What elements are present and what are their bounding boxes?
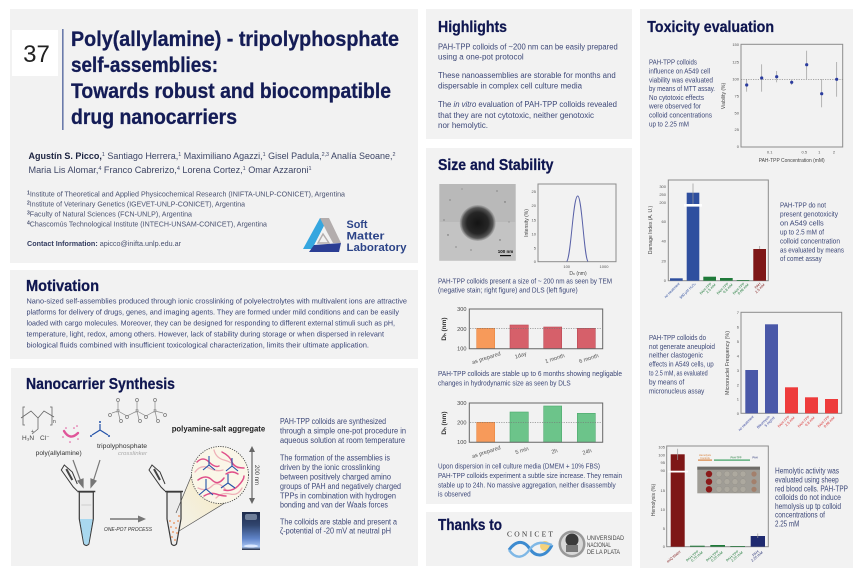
inset: hemolysis plate photo: Controls [700,456,711,460]
bar chart: hemolysis: 0.75 mM [690,551,704,563]
text: MTT assay: influence on A549 cell [649,66,710,75]
authors: Maria Lis Alomar, [28,165,99,175]
poster number [12,30,58,76]
DLS plot: 0 [534,259,537,264]
DLS plot: 15 [532,218,537,222]
chemical structure: poly(allylamine): H₃N [22,435,34,442]
chemical structure: tripolyphosphate [108,398,166,422]
icon: crosslinker [90,421,110,437]
bar chart: stability in cell culture media [441,401,603,460]
bar chart: stability in cell culture media: 24h [582,448,593,457]
affiliations: Institute of Veterinary Genetics (IGEVET-UNLP-CONICET), Argentina [30,202,245,209]
DLS plot: 5 [534,246,537,250]
authors: 1 [243,166,246,172]
caption: culture media: Upon dispersion in cell culture media (DMEM + 10% FBS) [438,462,600,471]
bar chart: micronucleus frequency: Micronuclei Frequency (%) [725,331,731,395]
bar chart: hemolysis: 95 [661,460,666,465]
bar chart: micronucleus frequency: Bleomycin [756,415,771,429]
scatter chart: viability: 0.1 [767,150,773,154]
bar chart: micronucleus frequency: no treatment [738,415,755,432]
bar chart: comet assay: no treatment [664,282,681,299]
bar chart: comet assay: 20 [662,258,667,264]
bar chart: micronucleus frequency: 7 [737,310,740,315]
panel: title [10,9,418,263]
logo: soft matter laboratory [303,218,407,254]
body text: platforms for delivery of drugs, genes, and imaging agents. They are formed under mild conditions and can be easily [26,308,399,317]
inset: hemolysis plate photo: PAH [752,456,758,460]
authors: Franco Cabrerizo, [101,165,177,175]
caption: culture media: stable up to 24h. No massive aggregation, neither disassembly [438,480,616,489]
text: comet assay: up to 2.5 mM of [780,227,825,236]
logo: CONICET: CONICET [507,530,553,539]
bar chart: comet assay: 2.5 mM [754,283,766,294]
bar chart: hemolysis: 15 [661,488,666,493]
scatter chart: viability: 50 [735,110,740,116]
bar chart: comet assay: 0 [664,278,667,283]
text: micronucleus assay: neither clastogenic [649,351,703,360]
bar chart: comet assay: PAH-TPP [716,281,730,296]
heading: Motivation [26,278,99,295]
caption: storage stability: changes in hydrodynamic size as seen by DLS [438,378,571,387]
authors: 4 [177,166,180,172]
bar chart: micronucleus frequency: 4 [737,354,740,358]
text: MTT assay: were observed for [648,102,701,111]
magnification cone [176,460,233,531]
caption: culture media: PAH-TPP colloids experiment a subtle size increase. They remain [438,471,622,480]
affiliations: 2 [27,201,30,207]
panel: thanks [426,512,632,566]
authors: 4 [98,166,101,172]
bar chart: comet assay: PAH-TPP [699,281,713,296]
bar chart: storage stability: 200 [457,327,466,333]
authors: 1 [178,152,181,158]
DLS plot: 100 [563,264,571,269]
bar chart: stability in cell culture media: 2h [551,448,559,456]
panel: nanocarrier synthesis [11,368,418,566]
affiliations: Chascomús Technological Institute (INTECH-UNSAM-CONICET), Argentina [30,222,267,229]
bar chart: storage stability: 6 month [579,353,600,365]
panel: toxicity evaluation [640,9,853,568]
text: micronucleus assay [649,333,715,395]
scatter chart: viability: PAH-TPP Concentration (mM) [759,158,825,164]
DLS plot: Intensity (%) [524,209,530,237]
logo: UNLP: DE LA PLATA [587,550,620,556]
bar chart: storage stability: 1day [514,351,528,361]
DLS plot: 1000 [600,264,609,269]
logo: soft matter laboratory: Matter [346,230,385,242]
text: comet assay: PAH-TPP do not [780,201,827,210]
bar chart: hemolysis: 0.25 mM [710,551,724,563]
text: comet assay: present genotoxicity [780,210,838,219]
magnified aggregate [192,446,248,504]
scatter chart: viability: 150 [732,42,740,47]
DLS plot: 25 [532,189,537,194]
labels: poly(allylamine) [36,450,82,457]
bar chart: micronucleus frequency: PAH-TPP [817,414,831,429]
text: MTT assay: PAH-TPP colloids [649,58,697,67]
scatter chart: viability: 75 [735,94,740,98]
DLS plot [524,184,616,277]
tube: before mixing [61,465,95,546]
inset: hemolysis plate photo: PAH-TPP [730,456,742,460]
logo: soft matter laboratory: Soft [346,219,368,231]
bar chart: hemolysis: 5 [663,526,666,531]
authors: Gisel Padula, [266,151,322,161]
logo: UNLP: UNIVERSIDAD [587,536,625,542]
scatter chart: viability: 125 [732,60,740,64]
DLS plot: 20 [532,203,537,208]
bar chart: micronucleus frequency: PAH-TPP [777,414,791,429]
synthesis text: ζ-potential of -20 mV at neutral pH [280,527,391,536]
bar chart: comet assay: 2.5 mM [705,283,717,294]
scatter chart: viability: 100 [732,76,740,82]
caption: size: (negative stain; right figure) and DLS (left figure) [438,286,578,295]
text: hemolysis: Hemolytic activity was [775,466,839,475]
text: micronucleus assay: PAH-TPP colloids do [649,333,706,342]
bar chart: comet assay: 500 μM H₂O₂ [679,281,697,300]
heading: Thanks to [438,517,502,534]
authors: Maximiliano Agazzi, [181,151,263,161]
authors: 1 [308,166,312,172]
highlights text: that they are not cytotoxic, neither genotoxic [438,111,594,120]
caption: size: PAH-TPP colloids present a size of ~ 200 nm as seen by TEM [438,276,612,285]
bar chart: stability in cell culture media: 200 [457,420,466,426]
bar chart: hemolysis: 2.25 mM [730,551,744,563]
scatter chart: viability: 25 [735,127,740,132]
bar chart: stability in cell culture media: 100 [457,440,466,446]
text: comet assay: colloid concentration [780,236,840,245]
highlights text: PAH-TPP colloids of ~200 nm can be easily prepared [438,42,618,52]
text: MTT assay: colloid concentrations [649,111,712,120]
bar chart: storage stability: 100 [457,346,466,352]
highlights text: using a one-pot protocol [438,52,524,62]
bar chart: comet assay: 0.8 mM [722,283,734,294]
chemical structure: tripolyphosphate: P [153,409,157,415]
bar chart: hemolysis: PAH-TPP [685,549,700,563]
heading: Nanocarrier Synthesis [26,376,175,393]
chemical structure: poly(allylamine): + [31,429,34,435]
authors: 1 [263,152,266,158]
bar chart: micronucleus frequency [725,310,842,432]
panel: highlights [426,9,632,139]
authors: Santiago Herrera, [105,151,178,161]
scatter chart: viability: 0.5 [802,150,808,154]
bar chart: hemolysis: 2.25 mM [750,551,764,563]
bar chart: micronucleus frequency: 3 [737,368,740,373]
title [71,28,399,129]
bar chart: hemolysis: 10 [661,507,666,512]
bar chart: micronucleus frequency: 6 [737,324,740,330]
caption: storage stability: PAH-TPP colloids are stable up to 6 months showing negligable [438,369,622,378]
synthesis text: PAH-TPP colloids are synthesized [280,417,386,426]
synthesis text: driven by the ionic crosslinking [280,463,380,472]
text: comet assay: on A549 cells [780,219,824,228]
chemical structure: tripolyphosphate: P [135,409,139,415]
bar chart: stability in cell culture media: 5 min [515,446,530,456]
scatter chart: viability: 1 [818,150,821,154]
icon: polyamine strand [62,425,79,443]
size arrow: 200 nm [253,465,259,485]
panel: motivation [10,270,418,359]
bar chart: storage stability: Dₕ (nm) [441,317,448,341]
bar chart: comet assay [648,180,768,300]
bar chart: storage stability: 300 [457,307,466,313]
bar chart: comet assay: 300 [659,184,667,189]
chemical structure: poly(allylamine): n [53,419,56,425]
chemical structure: tripolyphosphate: P [116,409,120,415]
bar chart: hemolysis: 100 [658,452,666,458]
bar chart: micronucleus frequency: 0 [737,411,740,416]
title: self-assemblies: [71,54,218,77]
DLS plot: Dₕ (nm) [569,271,587,277]
chemical structure: poly(allylamine) [21,407,56,442]
process arrow [104,516,152,533]
text: comet assay [780,201,844,263]
bar chart: micronucleus frequency: PAH-TPP [797,414,811,429]
affiliations: 4 [27,221,30,227]
heading: Highlights [438,19,507,36]
arrows into tube [73,460,100,487]
contact information: Contact Information: apicco@inifta.unlp.edu.ar [27,241,182,248]
bar chart: comet assay: 0.08 mM [737,283,750,296]
authors: Omar Azzaroni [246,165,308,175]
body text [26,297,407,349]
caption: storage stability [438,369,622,387]
text: MTT assay: up to 2.25 mM [649,120,689,129]
authors: Analía Seoane, [329,151,393,161]
bar chart: micronucleus frequency: 1 [737,396,740,402]
bar chart: comet assay: 200 [659,200,667,205]
bar chart: comet assay: 250 [659,192,667,197]
synthesis text [280,417,406,536]
bar chart: comet assay: Damage Index (A. U.) [648,205,654,254]
caption: culture media: is observed [438,490,471,499]
authors: 2 [393,152,396,158]
affiliations: Faculty of Natural Sciences (FCN-UNLP), Argentina [30,212,192,219]
caption: culture media [438,462,622,499]
highlights text [438,42,618,130]
text: hemolysis: 2.25 mM [775,520,800,529]
bar chart: storage stability [441,307,603,366]
heading: Toxicity evaluation [647,19,774,36]
text: MTT assay [648,58,715,129]
highlights text: dispersable in complex cell culture media [438,82,583,90]
body text: Nano-sized self-assemblies produced through ionic crosslinking of polyelectrolytes with multivalent ions are attractive [26,297,407,306]
labels [36,425,266,457]
text: micronucleus assay: micronucleus assay [649,386,704,395]
scatter chart: viability: 0 [737,144,740,149]
synthesis text: The formation of the assemblies is [280,453,390,462]
tube: after mixing [149,465,183,546]
bar chart: comet assay: PAH-TPP [732,281,746,296]
process arrow: ONE-POT PROCESS [104,527,152,533]
bar chart: micronucleus frequency: 2.5 mM [784,416,796,427]
size arrow [249,446,259,504]
bar chart: hemolysis [651,444,768,564]
inset: hemolysis plate photo [697,453,760,493]
text: MTT assay: No cytotoxic effects [649,93,704,102]
body text: temperature, light, redox, among others. However, lack of stability during storage or when dispersed in relevant [26,330,385,339]
bar chart: hemolysis: 90 [661,468,666,473]
bar chart: comet assay: PAH [754,282,762,290]
scatter chart: viability: Viability (%) [721,83,727,109]
synthesis text: TPPs in combination with hydrogen [280,491,396,500]
bar chart: micronucleus frequency: 5 mg/ml [764,416,776,428]
text: micronucleus assay: not generate aneuploid [649,342,715,351]
authors: 1 [102,152,105,158]
bar chart: hemolysis: PAH [752,549,760,557]
inset: hemolysis plate photo: Hemolysis [699,453,712,457]
synthesis text: groups of PAH and negatively charged [280,482,401,491]
text: MTT assay: viability was evaluated [649,75,713,84]
authors [28,151,396,175]
affiliations: Institute of Theoretical and Applied Physicochemical Research (INIFTA-UNLP-CONICET), Argentina [30,192,345,199]
text: comet assay: of comet assay [780,254,822,263]
bar chart: stability in cell culture media: Dₕ (nm) [441,411,448,435]
bar chart: hemolysis: Hemolysis (%) [651,484,657,516]
bar chart: storage stability: as prepared [471,351,502,366]
text: micronucleus assay: by means of [649,377,685,386]
text: hemolysis [775,466,848,529]
bar chart: comet assay: 40 [662,238,667,244]
bar chart: micronucleus frequency: 2 [737,382,740,388]
chemical structure: poly(allylamine): Cl⁻ [40,435,50,442]
bar chart: storage stability: 1 month [545,353,566,365]
highlights text: These nanoassemblies are storable for months and [438,71,616,80]
affiliations: 3 [27,211,30,217]
synthesis text: through a simple one-pot procedure in [280,427,406,436]
bar chart: hemolysis: PAH-TPP [705,549,720,563]
poster number: 37 [23,41,50,68]
text: micronucleus assay: to 2.5 mM, as evaluated [649,369,708,378]
body text: biological fluids combined with insufficient toxicological characterization, limits their ultimate application. [26,340,369,349]
logo: CONICET [507,530,553,557]
highlights text: The in vitro evaluation of PAH-TPP colloids revealed [438,100,617,109]
bar chart: hemolysis: 0 [663,544,666,549]
bar chart: hemolysis: PAH-TPP [725,549,740,563]
bar chart: hemolysis: 105 [658,444,666,450]
panel: size and stability [426,148,632,504]
scatter chart: viability [721,42,843,164]
bar chart: micronucleus frequency: 0.08 mM [823,416,836,429]
title: Towards robust and biocompatible [71,80,391,103]
authors: 2,3 [322,152,329,158]
bar chart: hemolysis: miQ Water [666,549,682,564]
bar chart: micronucleus frequency: 5 [737,339,740,344]
authors: Agustín S. Picco, [28,151,102,161]
logo: soft matter laboratory: Laboratory [346,242,407,254]
authors: Lorena Cortez, [180,165,243,175]
labels: tripolyphosphate [97,443,147,450]
caption: size [438,276,612,295]
text: hemolysis: evaluated using sheep [775,475,839,484]
title: Poly(allylamine) - tripolyphosphate [71,28,399,51]
text: comet assay: as evaluated by means [780,245,844,254]
synthesis text: between positively charged amino [280,472,392,481]
synthesis text: aqueous solution at room temperature [280,436,405,445]
affiliations: 1 [27,191,30,197]
bar chart: comet assay: 60 [662,219,667,224]
TEM image [439,184,516,261]
vial photo [242,512,260,550]
labels: polyamine-salt aggregate [172,425,266,434]
synthesis text: bonding and van der Waals forces [280,501,388,510]
text: hemolysis: colloids do not induce [775,493,841,502]
text: micronucleus assay: effects in A549 cells, up [649,360,714,369]
highlights text: nor hemolytic. [438,121,488,130]
TEM image: 100 nm [498,249,513,254]
text: hemolysis: hemolysis up tp colloid [775,502,841,511]
body text: loaded with cargo molecules. Moreover, they can be designed for responding to different external stimuli such as pH, [26,319,395,328]
text: hemolysis: concentrations of [775,511,826,520]
bar chart: micronucleus frequency: 0.8 mM [804,416,816,427]
title: drug nanocarriers [71,106,237,129]
heading: Size and Stability [438,157,554,174]
bar chart: stability in cell culture media: as prepared [471,445,502,460]
labels: crosslinker [118,451,148,457]
DLS plot: 10 [532,232,537,236]
synthesis text: The colloids are stable and present a [280,517,397,526]
text: MTT assay: by means of MTT assay. [649,84,715,93]
scatter chart: viability: 2 [833,150,836,154]
logo: UNLP [558,530,625,558]
affiliations [27,191,345,229]
logo: UNLP: NACIONAL [587,543,612,549]
bar chart: stability in cell culture media: 300 [457,401,466,407]
